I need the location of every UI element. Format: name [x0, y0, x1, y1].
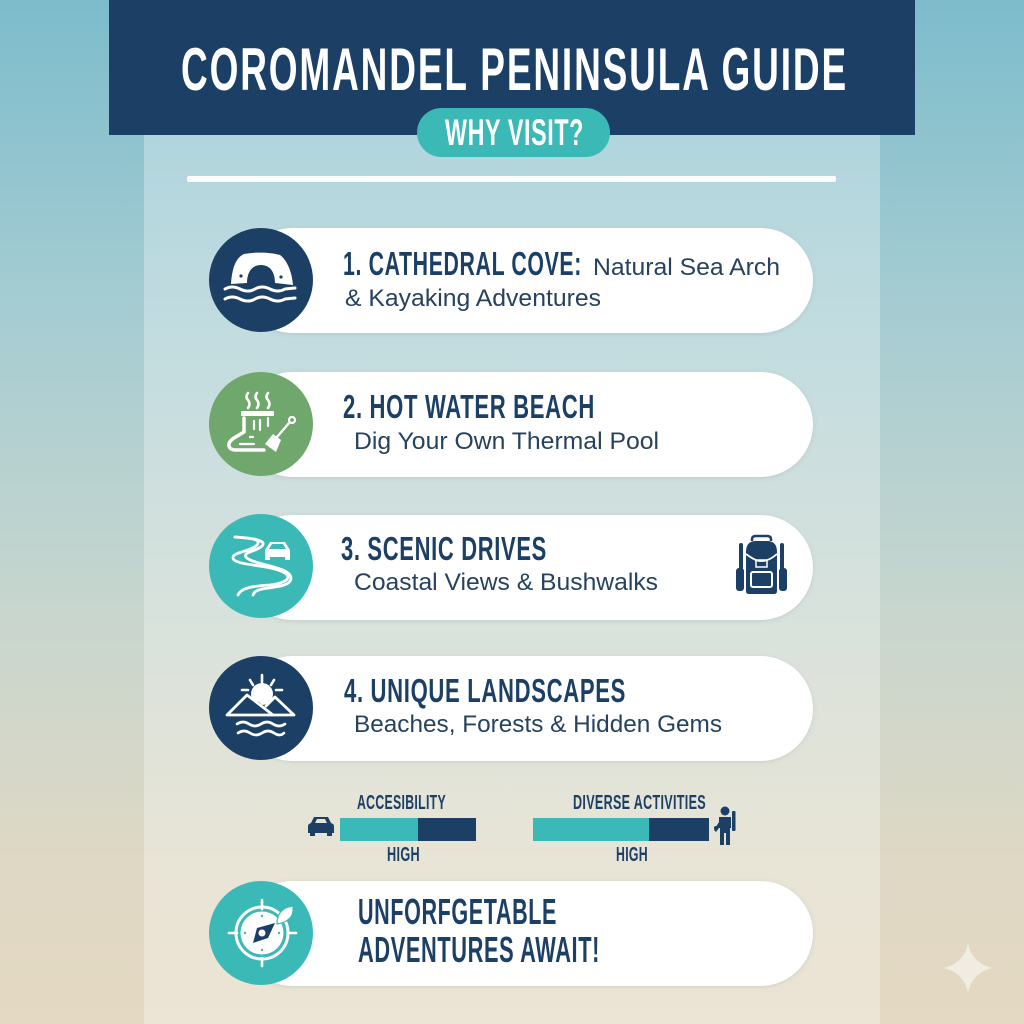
header banner: [109, 0, 915, 135]
icon: sparkle: [943, 943, 993, 993]
icon: car: [308, 817, 334, 836]
panel: unique landscapes: [209, 656, 813, 761]
chart: diverse activities bar: [533, 792, 736, 866]
panel: scenic drives: [209, 514, 813, 620]
text: cathedral cove: & Kayaking Adventures: [345, 285, 601, 312]
panel: hot water beach: [209, 372, 813, 477]
chart: accessibility bar: [308, 792, 476, 866]
text: unique landscapes: [344, 672, 722, 738]
text: closing message: ADVENTURES AWAIT!: [358, 929, 600, 970]
icon: hiker: [714, 806, 736, 845]
central panel: [144, 130, 880, 1024]
text: cathedral cove: 1. CATHEDRAL COVE:: [343, 245, 582, 282]
subtitle pill: why visit: WHY VISIT?: [445, 112, 584, 153]
icon: backpack: [736, 536, 787, 594]
text: unique landscapes: Beaches, Forests & Hidden Gems: [354, 711, 722, 738]
text: scenic drives: 3. SCENIC DRIVES: [341, 530, 547, 567]
text: cathedral cove: Natural Sea Arch: [593, 254, 780, 281]
panel: closing message: [209, 881, 813, 986]
text: scenic drives: Coastal Views & Bushwalks: [354, 569, 658, 596]
text: hot water beach: [343, 388, 659, 455]
text: scenic drives: [341, 530, 658, 596]
icon: mountains and sun: [227, 675, 294, 735]
icon: thermal pool and shovel: [229, 393, 295, 452]
icon: sea arch: [225, 253, 295, 301]
chart: accessibility bar: ACCESIBILITY: [357, 792, 446, 814]
icon: winding road and car: [233, 537, 291, 595]
text: cathedral cove: [343, 245, 780, 312]
chart: diverse activities bar: HIGH: [616, 844, 648, 866]
chart: accessibility bar: HIGH: [387, 844, 420, 866]
subtitle pill: why visit: [417, 108, 610, 157]
text: closing message: [358, 891, 600, 970]
icon: compass with leaf: [229, 900, 296, 966]
text: hot water beach: Dig Your Own Thermal Pool: [354, 428, 659, 455]
text: unique landscapes: 4. UNIQUE LANDSCAPES: [344, 672, 626, 709]
text: closing message: UNFORFGETABLE: [358, 891, 557, 932]
chart: diverse activities bar: DIVERSE ACTIVITIES: [573, 792, 706, 814]
panel: cathedral cove: [209, 228, 813, 333]
text: hot water beach: 2. HOT WATER BEACH: [343, 388, 595, 425]
